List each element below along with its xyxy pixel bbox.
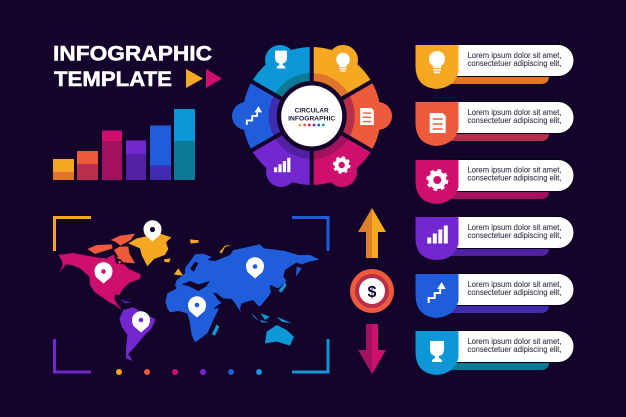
card: document: consectetuer adipiscing elit, xyxy=(468,116,562,125)
map pin: Africa xyxy=(188,296,206,318)
icon: double arrow xyxy=(186,69,222,88)
map frame xyxy=(54,218,328,372)
Eurasia, Africa and Oceania xyxy=(165,239,319,346)
center label xyxy=(288,108,336,126)
circular infographic xyxy=(232,30,392,200)
card: document xyxy=(416,102,574,146)
card: gear xyxy=(416,160,574,204)
segment: stairs xyxy=(232,82,312,150)
title xyxy=(53,42,212,91)
card: bars: Lorem ipsum dolor sit amet, xyxy=(468,223,562,232)
card: stairs: consectetuer adipiscing elit, xyxy=(468,288,562,297)
card: bulb xyxy=(416,44,574,89)
dot row xyxy=(116,369,262,375)
card: trophy xyxy=(416,330,574,375)
icon: dollar coin: $ xyxy=(368,284,377,301)
segment: bulb xyxy=(312,45,372,116)
card: trophy: consectetuer adipiscing elit, xyxy=(468,345,562,354)
segment: document xyxy=(312,82,392,150)
card: gear: consectetuer adipiscing elit, xyxy=(468,174,562,182)
center label: CIRCULAR xyxy=(295,108,329,114)
segment: trophy xyxy=(252,45,312,116)
map pin: Asia xyxy=(246,257,264,278)
card: stairs: Lorem ipsum dolor sit amet, xyxy=(468,280,562,289)
center label: INFOGRAPHIC xyxy=(288,116,336,122)
arrow: down xyxy=(358,324,386,374)
title: TEMPLATE xyxy=(54,68,172,91)
Americas and Greenland xyxy=(58,234,183,361)
card: bars xyxy=(416,216,574,260)
card: bulb: Lorem ipsum dolor sit amet, xyxy=(468,51,562,60)
world map xyxy=(58,234,319,361)
segment: gear xyxy=(312,116,372,187)
segment: bars xyxy=(252,116,312,187)
card: bars: consectetuer adipiscing elit, xyxy=(468,231,562,240)
map pin: North America xyxy=(94,262,112,284)
card: gear: Lorem ipsum dolor sit amet, xyxy=(468,166,562,174)
arrow: up xyxy=(358,208,386,258)
card: bulb: consectetuer adipiscing elit, xyxy=(468,59,562,68)
card: document: Lorem ipsum dolor sit amet, xyxy=(468,108,562,117)
icon: dollar coin xyxy=(350,269,394,313)
title: INFOGRAPHIC xyxy=(53,42,212,66)
map pin: South America xyxy=(132,311,150,332)
card: trophy: Lorem ipsum dolor sit amet, xyxy=(468,337,562,346)
card: stairs xyxy=(416,274,574,318)
bar chart xyxy=(53,109,195,180)
map pin: Greenland xyxy=(144,220,162,242)
